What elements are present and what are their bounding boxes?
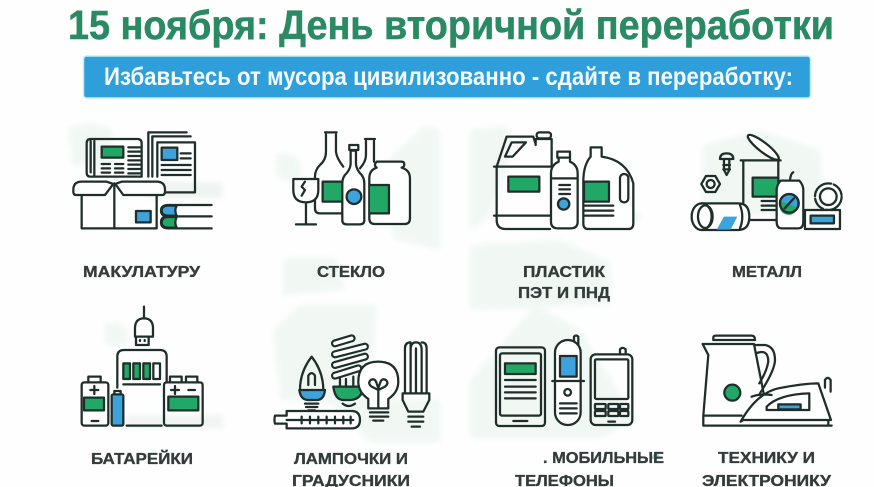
- label: plastic: [518, 264, 611, 302]
- label: phones: [515, 450, 664, 487]
- icon: glass: [293, 132, 410, 224]
- label: lamps: [292, 451, 410, 487]
- label: lamps: ЛАМПОЧКИ И: [294, 451, 408, 468]
- label: glass: СТЕКЛО: [317, 264, 385, 281]
- label: plastic: ПЭТ И ПНД: [518, 285, 611, 302]
- icon: kettle and iron: [703, 336, 832, 426]
- label: paper: МАКУЛАТУРУ: [83, 264, 201, 281]
- icon: paper waste: [73, 132, 212, 228]
- icon: plastic: [494, 132, 633, 229]
- label: metal: МЕТАЛЛ: [732, 264, 802, 281]
- label: phones: . МОБИЛЬНЫЕ: [543, 450, 664, 467]
- icon: batteries: [82, 307, 203, 426]
- label: plastic: ПЛАСТИК: [523, 264, 605, 281]
- icon: mobile phones: [496, 335, 632, 426]
- teal marker at bottom: [650, 451, 662, 459]
- icon: lamps and thermometers: [274, 338, 429, 428]
- background: pale recycling arrows: [68, 123, 825, 442]
- banner: Избавьтесь от мусора цивилизованно - сдайте в переработку:: [104, 63, 793, 91]
- label: batteries: БАТАРЕЙКИ: [91, 449, 193, 468]
- label: appliances: [702, 450, 832, 487]
- icon: metal: [692, 132, 842, 230]
- banner: [84, 56, 810, 98]
- label: appliances: ТЕХНИКУ И: [718, 450, 815, 467]
